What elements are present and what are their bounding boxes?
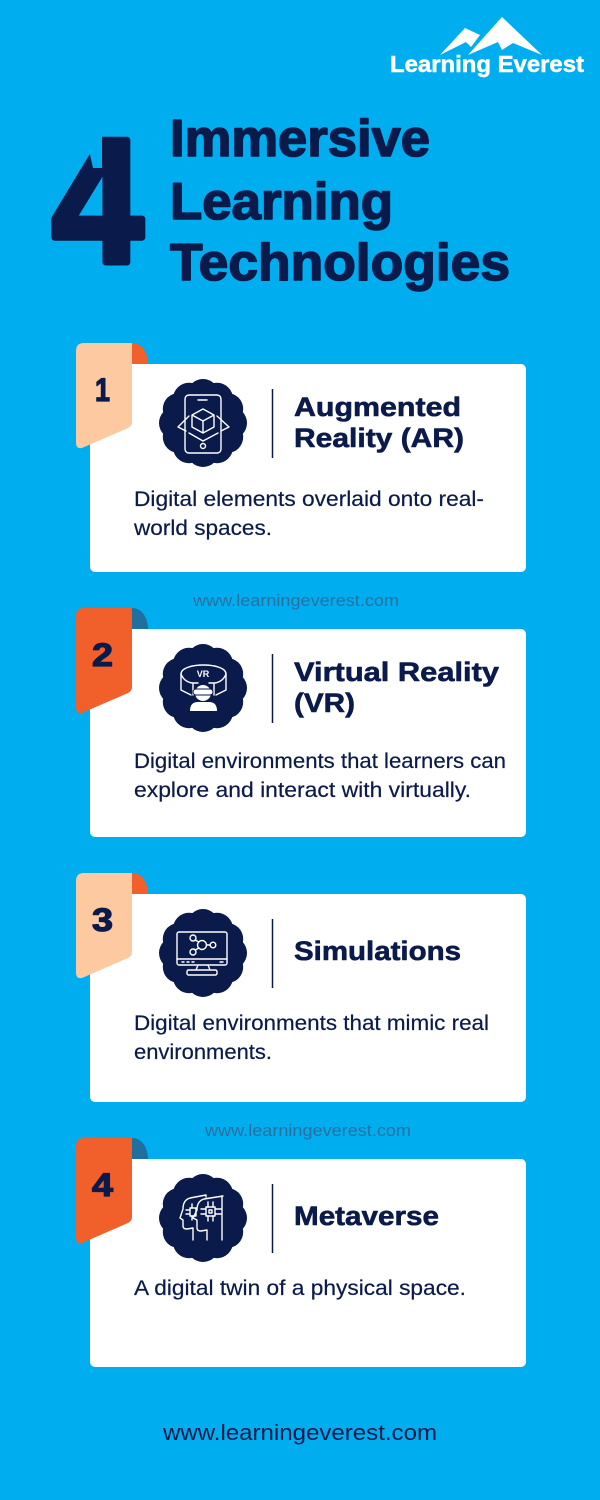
panel: Virtual Reality — [76, 608, 526, 837]
number flag — [76, 343, 132, 448]
heading: Augmented — [294, 392, 461, 422]
heading: (VR) — [294, 688, 355, 718]
card background — [90, 894, 526, 1102]
icon: AR phone with cube — [159, 379, 247, 467]
divider — [272, 654, 274, 723]
big number 4: 4 — [52, 102, 143, 300]
description: Digital environments that mimic real — [134, 1012, 489, 1035]
heading: Simulations — [294, 936, 461, 966]
icon: monitor with nodes — [159, 909, 247, 997]
number flag — [76, 873, 132, 978]
card background — [90, 1159, 526, 1367]
description: world spaces. — [133, 517, 272, 540]
flag fold — [130, 608, 148, 629]
heading — [294, 657, 499, 718]
divider — [272, 919, 274, 988]
panel: Augmented Reality — [76, 343, 526, 572]
divider — [272, 1184, 274, 1253]
number flag — [76, 608, 132, 713]
description — [134, 1012, 489, 1064]
heading: Metaverse — [294, 1201, 439, 1231]
number 1: 1 — [95, 372, 110, 408]
title line 3: Technologies — [170, 234, 510, 292]
panel: Metaverse — [76, 1138, 526, 1367]
title line 2: Learning — [170, 173, 393, 231]
heading: Reality (AR) — [294, 423, 464, 453]
description: Digital environments that learners can — [134, 750, 506, 773]
heading: Virtual Reality — [294, 657, 499, 687]
number 2: 2 — [92, 637, 113, 673]
flag fold — [130, 873, 148, 894]
title — [52, 102, 510, 300]
description: explore and interact with virtually. — [134, 779, 471, 802]
icon: VR headset person — [159, 644, 247, 732]
flag fold — [130, 343, 148, 364]
heading — [294, 392, 464, 453]
divider — [272, 389, 274, 458]
panel: Simulations — [76, 873, 526, 1102]
description — [133, 488, 484, 540]
icon: mountains — [440, 17, 542, 55]
description — [134, 750, 506, 802]
card background — [90, 364, 526, 572]
number 4: 4 — [92, 1167, 113, 1203]
description: environments. — [134, 1041, 272, 1064]
footer URL: www.learningeverest.com — [162, 1420, 437, 1445]
number 3: 3 — [92, 902, 113, 938]
logo wordmark: Learning Everest — [390, 51, 584, 77]
watermark URL 1: www.learningeverest.com — [192, 592, 399, 610]
icon: twin heads with chips — [159, 1174, 247, 1262]
logo: Learning Everest — [390, 17, 584, 77]
title line 1: Immersive — [170, 110, 430, 168]
watermark URL 2: www.learningeverest.com — [204, 1122, 411, 1140]
VR label: VR — [197, 669, 210, 679]
description: Digital elements overlaid onto real- — [134, 488, 484, 511]
number flag — [76, 1138, 132, 1243]
card background — [90, 629, 526, 837]
description: A digital twin of a physical space. — [134, 1277, 466, 1300]
flag fold — [130, 1138, 148, 1159]
